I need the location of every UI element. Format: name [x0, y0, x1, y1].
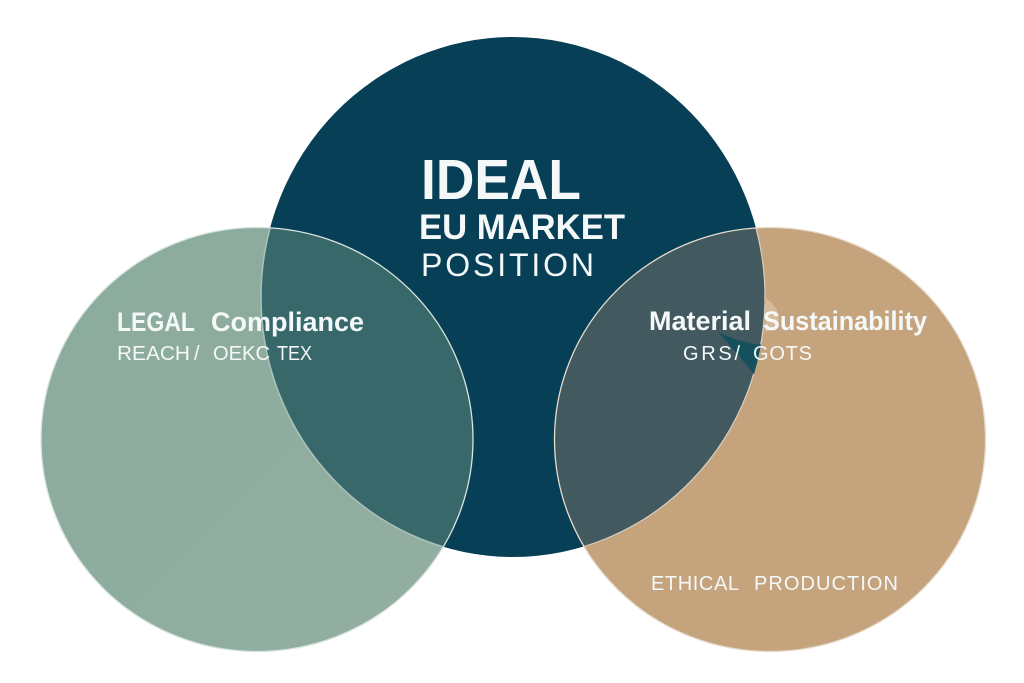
label: reach oekotex: REACH	[117, 343, 190, 365]
circle: material sustainability	[554, 228, 986, 652]
label: reach oekotex	[117, 343, 312, 365]
overlap artifact: light patch	[764, 297, 779, 332]
heading: position: POSITION	[421, 247, 594, 283]
overlap artifact: dark wedge	[718, 332, 761, 374]
label: grs gots: GRS/	[683, 343, 740, 365]
label: legal compliance: Compliance	[211, 307, 364, 337]
label: material sustainability	[649, 306, 927, 336]
label: reach oekotex: /	[194, 343, 200, 365]
label: grs gots	[683, 343, 812, 365]
outline: sustainability circle	[554, 228, 986, 652]
label: legal compliance	[117, 307, 364, 337]
label: reach oekotex: OEKC	[213, 343, 270, 365]
label: reach oekotex: TEX	[277, 343, 312, 365]
circle: ideal EU market position	[261, 37, 765, 557]
circle: legal compliance	[41, 228, 473, 652]
overlap: legal and ideal	[260, 228, 472, 548]
label: ethical production: ETHICAL	[651, 573, 739, 595]
overlap: sustainability and ideal	[555, 228, 766, 547]
label: ethical production: PRODUCTION	[754, 573, 898, 595]
outline: legal circle	[41, 228, 473, 652]
heading: ideal: IDEAL	[421, 148, 581, 212]
label: material sustainability: Sustainability	[763, 306, 927, 336]
heading: EU market: EU MARKET	[419, 208, 625, 247]
label: legal compliance: LEGAL	[117, 307, 195, 337]
label: grs gots: GOTS	[753, 343, 812, 365]
label: material sustainability: Material	[649, 306, 751, 336]
label: ethical production	[651, 573, 898, 595]
